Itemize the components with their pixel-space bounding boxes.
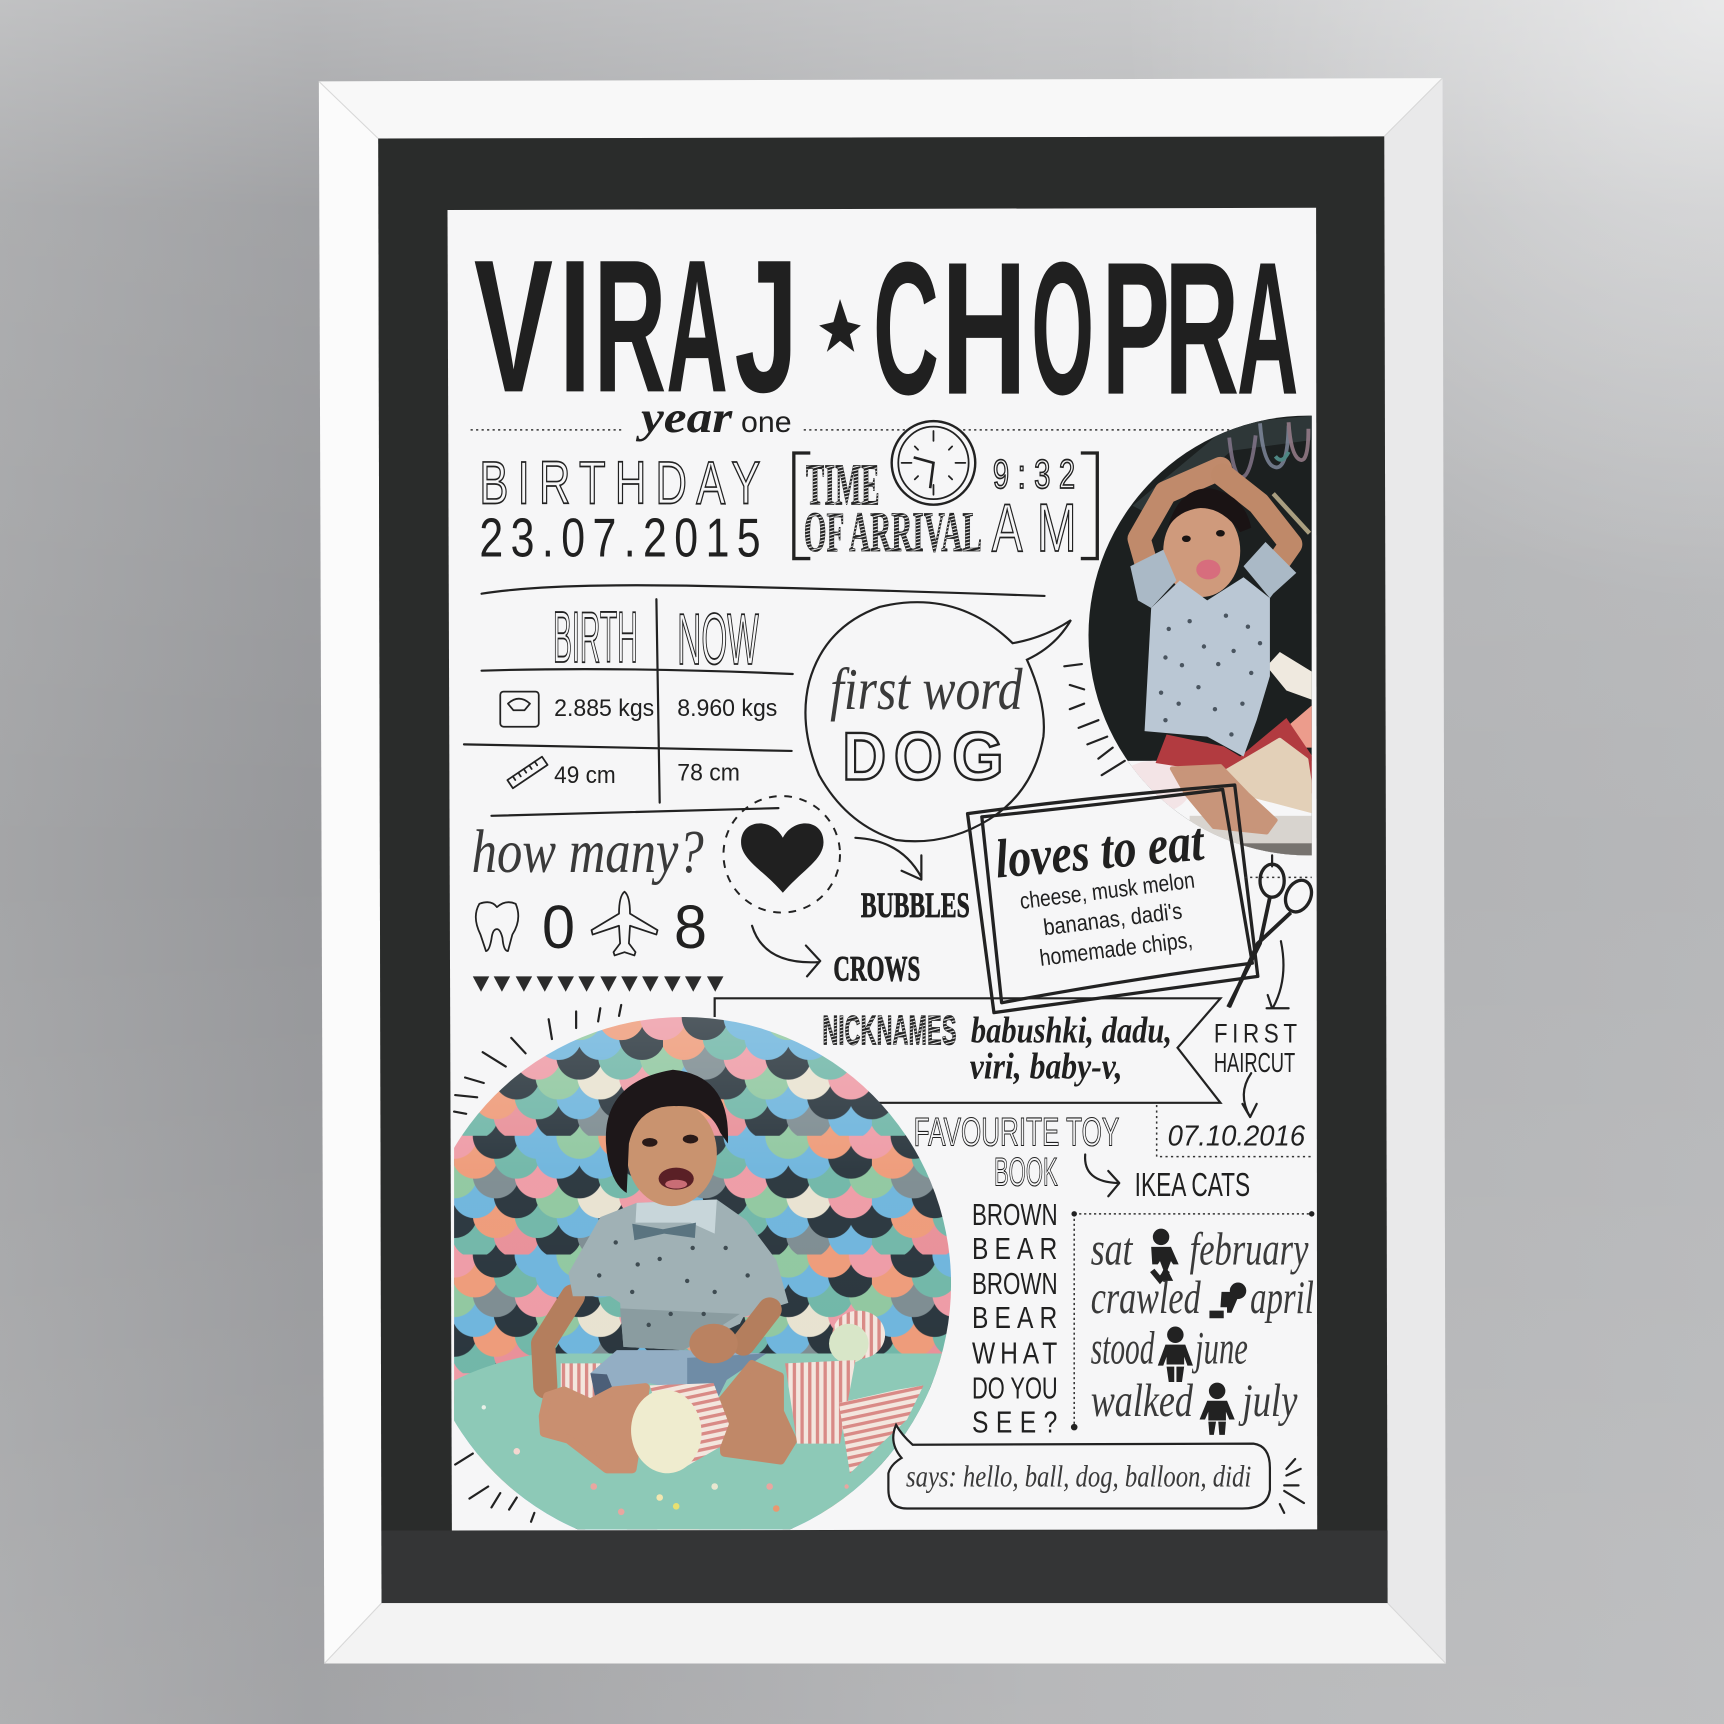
title: I [559, 221, 592, 432]
title: A [666, 221, 728, 432]
icon: sitting baby [1150, 1229, 1179, 1284]
icon: heart [741, 823, 824, 893]
blankets [1270, 652, 1312, 700]
speech bubble: first word: first word [830, 656, 1023, 722]
scissors icon [1228, 855, 1316, 1007]
stats table: birth and now [464, 585, 1045, 816]
title: C [873, 224, 939, 435]
nicknames banner: viri, baby-v, [970, 1047, 1123, 1088]
nicknames banner: NICKNAMES [822, 1007, 957, 1054]
photo rays [454, 1005, 621, 1522]
chalk scribbles [1229, 422, 1309, 533]
favourite toy and book [914, 1111, 1250, 1203]
milestones panel: crawled [1091, 1272, 1201, 1323]
triangle bunting row [473, 976, 723, 992]
favourite toy and book: IKEA CATS [1135, 1166, 1250, 1203]
icon: airplane [592, 892, 657, 955]
label: first haircut: HAIRCUT [1214, 1047, 1295, 1078]
haircut date box: 07.10.2016 [1168, 1121, 1305, 1153]
label: first haircut: FIRST [1214, 1020, 1297, 1049]
stats table: birth and now: NOW [677, 599, 759, 680]
arrow to bubbles [855, 838, 921, 880]
shirt sleeves [1130, 550, 1176, 608]
black mat board [378, 136, 1388, 1603]
white picture frame [319, 78, 1446, 1664]
loves to eat box [968, 785, 1258, 1013]
title: R [1164, 224, 1239, 435]
time of arrival block: TIME [806, 452, 880, 518]
head [1163, 505, 1240, 597]
label: crows: CROWS [833, 949, 920, 989]
stats table: birth and now: 8.960 kgs [677, 696, 777, 722]
scale backdrop [454, 1017, 951, 1530]
shirt print [1159, 614, 1262, 737]
speech bubble: first word [805, 602, 1071, 841]
book text: brown bear: SEE? [972, 1405, 1057, 1439]
arrow to haircut date [1242, 1073, 1257, 1117]
book text: brown bear: DO YOU [972, 1371, 1058, 1406]
title: H [941, 224, 1027, 435]
speech bubble: first word: D [842, 719, 886, 795]
paper cups [785, 1360, 855, 1444]
birthday date block: BIRTHDAY [479, 450, 760, 517]
how many block: 0 [542, 893, 575, 962]
favourite toy and book: BOOK [994, 1150, 1058, 1194]
time of arrival block: OF ARRIVAL [804, 501, 982, 564]
shorts [1156, 718, 1314, 794]
loves to eat box: loves to eat [993, 810, 1207, 890]
icon: weighing scale [500, 692, 539, 727]
icon: clock [892, 421, 975, 505]
speech bubble: says [888, 1425, 1270, 1508]
title: V [474, 221, 553, 432]
milestones panel: stood [1091, 1322, 1155, 1373]
shorts [590, 1350, 766, 1406]
milestones panel: july [1238, 1375, 1298, 1426]
head [627, 1101, 717, 1206]
time of arrival block: 9:32 [993, 451, 1075, 497]
icon: ruler [507, 757, 548, 788]
book text: brown bear: BROWN [972, 1266, 1058, 1301]
speech bubble: first word: O [894, 719, 942, 795]
bow tie [632, 1223, 696, 1240]
milestones panel: sat [1091, 1223, 1133, 1274]
book text: brown bear [972, 1197, 1058, 1439]
far-left cup [561, 1363, 610, 1407]
icon: crawling baby [1209, 1283, 1246, 1318]
book text: brown bear: BEAR [972, 1301, 1057, 1335]
stats table: birth and now: 78 cm [677, 761, 740, 787]
stats table: birth and now: 49 cm [554, 763, 616, 789]
subtitle: year one [471, 393, 1311, 442]
subtitle: year one: year [635, 393, 733, 442]
milestones panel [1071, 1211, 1314, 1435]
label: bubbles: BUBBLES [861, 885, 970, 925]
milestones panel: february [1190, 1223, 1309, 1274]
how many block [472, 818, 707, 962]
arrow to book title [1085, 1154, 1119, 1196]
back cup [832, 1311, 885, 1359]
shirt [1145, 577, 1270, 756]
how many block: 8 [674, 893, 707, 962]
book text: brown bear: WHAT [972, 1336, 1057, 1370]
icon: tooth [476, 902, 518, 951]
legs [1172, 766, 1275, 832]
icon: walking baby [1200, 1383, 1235, 1435]
subtitle: year one: one [741, 406, 792, 439]
bubble rays [1064, 664, 1125, 775]
title [474, 221, 1298, 435]
shirt print [597, 1240, 750, 1327]
haircut date box [1157, 1105, 1312, 1157]
loves to eat box: bananas, dadi's [1042, 897, 1184, 940]
speech bubble: says: says: hello, ball, dog, balloon, didi [906, 1460, 1251, 1494]
cream blanket [1224, 740, 1314, 811]
stats table: birth and now: 2.885 kgs [554, 696, 654, 722]
right arm and hand [743, 1309, 770, 1344]
icon: star [819, 299, 861, 352]
says bubble rays [1280, 1459, 1304, 1513]
mint floor [407, 1353, 957, 1539]
confetti [482, 1405, 849, 1515]
collar [636, 1200, 717, 1234]
milestones panel: walked [1091, 1375, 1194, 1426]
framed poster infographic: A [1237, 224, 1298, 435]
loves to eat box: homemade chips, [1038, 926, 1194, 971]
label: first haircut [1214, 1020, 1297, 1078]
icon: standing baby [1158, 1327, 1193, 1382]
title: O [1031, 224, 1094, 435]
brackets [794, 453, 1097, 559]
speech bubble: first word: G [952, 719, 1004, 795]
book text: brown bear: BEAR [972, 1231, 1057, 1266]
milestones panel: june [1192, 1322, 1248, 1373]
arrow to crows [752, 926, 820, 976]
shirt [568, 1200, 788, 1350]
loves to eat box: cheese, musk melon [1018, 867, 1196, 914]
arms [1139, 468, 1220, 577]
title: J [734, 221, 798, 432]
time of arrival block [794, 421, 1097, 566]
nicknames banner: babushki, dadu, [971, 1010, 1172, 1051]
title: R [594, 221, 666, 432]
heart in dashed circle [723, 796, 840, 913]
birthday date block [479, 450, 761, 569]
nicknames banner [715, 998, 1220, 1103]
stats table: birth and now: BIRTH [553, 597, 638, 678]
favourite toy and book: FAVOURITE TOY [914, 1111, 1119, 1155]
legs [543, 1388, 645, 1469]
arrow to first haircut [1267, 941, 1289, 1008]
time of arrival block: A [992, 490, 1023, 566]
birthday date block: 23.07.2015 [479, 507, 761, 569]
time of arrival block: M [1037, 490, 1076, 566]
how many block: how many? [472, 818, 704, 886]
title: P [1102, 224, 1170, 435]
top-right photo: toddler with raised arms [1088, 416, 1312, 856]
baby arms [543, 1296, 573, 1386]
bottom-left photo: laughing baby [454, 1017, 951, 1530]
book text: brown bear: BROWN [972, 1197, 1058, 1232]
poster sheet [447, 208, 1317, 1530]
milestones panel: april [1250, 1272, 1314, 1323]
